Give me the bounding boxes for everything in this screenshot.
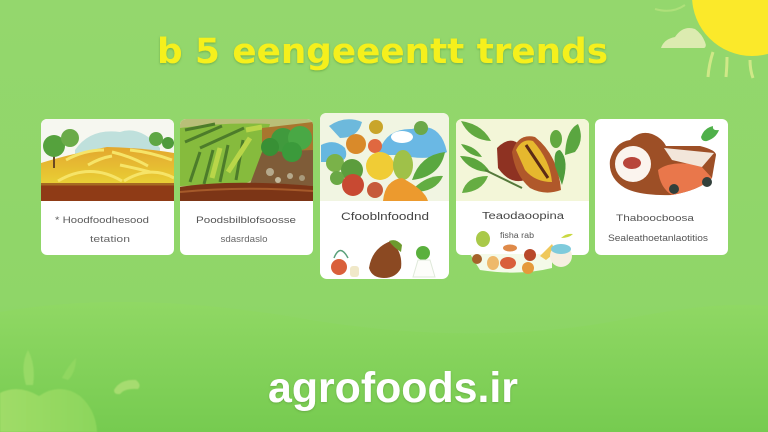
caption: * Hoodfoodhesood bbox=[55, 215, 149, 226]
caption line 2: Sealeathoetanlaotitios bbox=[608, 233, 708, 244]
caption: Poodsbilblofsoosse bbox=[196, 215, 296, 226]
icon: cloud bbox=[661, 28, 706, 48]
caption: Cfooblnfoodnd bbox=[341, 211, 429, 223]
illustration: crop rows bbox=[180, 119, 313, 201]
caption: Teaodaoopina bbox=[482, 211, 565, 222]
caption line 2: sdasrdaslo bbox=[220, 234, 268, 245]
icon: small fruit and jug bbox=[331, 240, 435, 278]
caption: Thaboocboosa bbox=[616, 213, 695, 224]
footer brand: agrofoods.ir bbox=[268, 365, 518, 412]
title: b 5 eengeeentt trends bbox=[157, 32, 608, 72]
icon: food scatter bbox=[470, 231, 573, 274]
illustration: cocoa pods and leaves bbox=[456, 119, 589, 201]
panel: card 5 bbox=[595, 119, 728, 255]
icon: sun bbox=[655, 0, 768, 78]
decoration: apple silhouette bbox=[0, 350, 140, 432]
illustration: golden fields bbox=[41, 119, 174, 201]
icon: green leaf bbox=[701, 126, 719, 141]
panel: card 4 bbox=[456, 119, 589, 274]
panel: card 1 bbox=[41, 119, 174, 255]
panel: card 2 bbox=[180, 119, 313, 255]
panel: card 3 bbox=[320, 113, 449, 279]
illustration: produce and sky bbox=[320, 113, 449, 201]
caption line 2: tetation bbox=[90, 234, 130, 245]
illustration: sliced roots bbox=[610, 133, 716, 195]
caption line 2: fisha rab bbox=[500, 231, 535, 240]
